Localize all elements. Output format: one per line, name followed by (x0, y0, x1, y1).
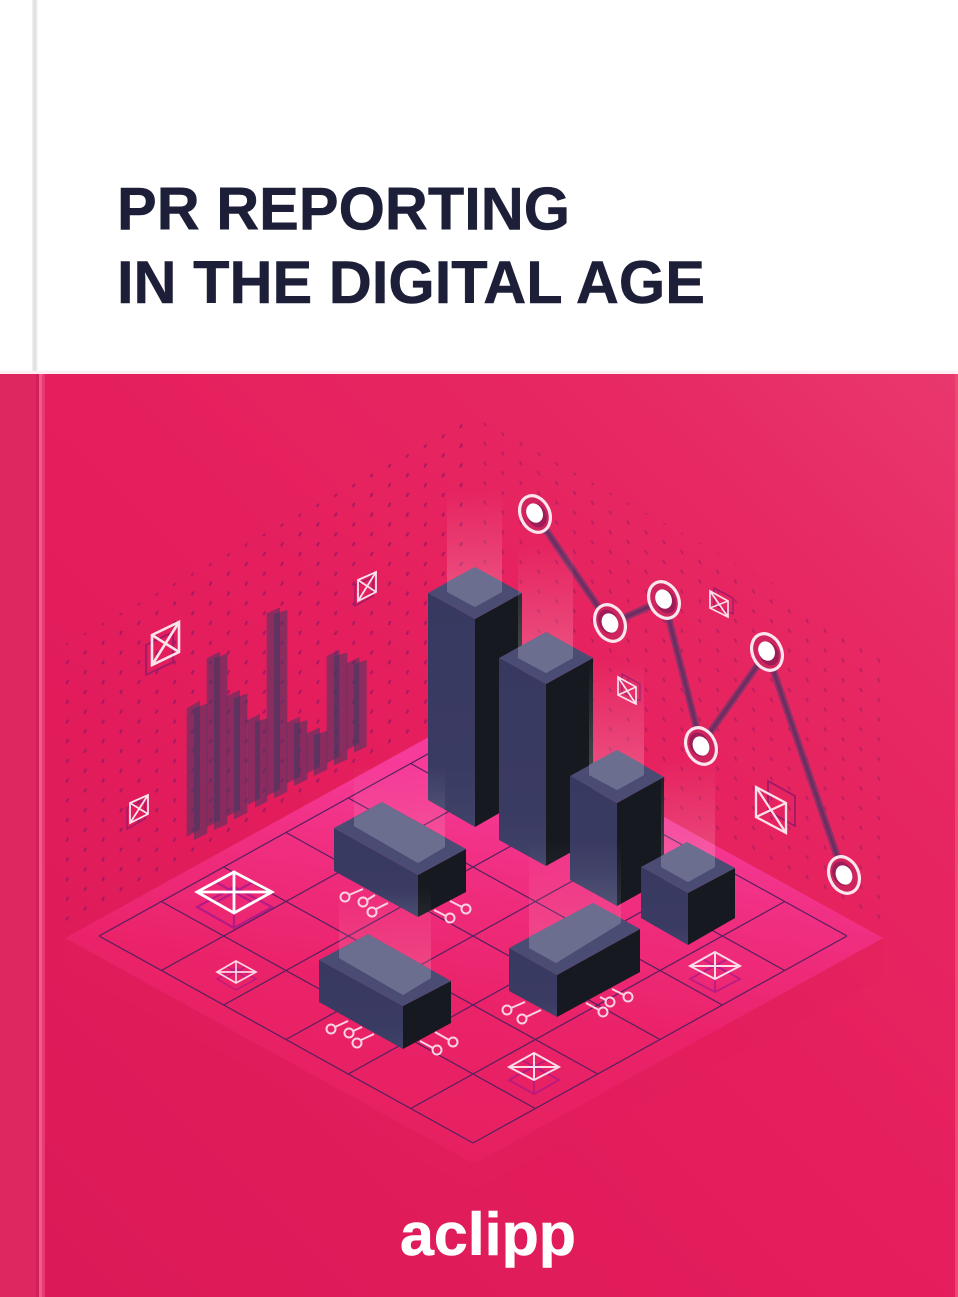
aclipp logo: aclipp (400, 1201, 576, 1268)
lit block tops (339, 567, 715, 995)
wall icon center right (618, 674, 640, 704)
title (117, 176, 705, 316)
floor surface (65, 712, 883, 1164)
white title panel (0, 0, 958, 373)
chart line (535, 514, 844, 876)
connector pins box C (502, 989, 632, 1024)
data point 5 (746, 629, 788, 675)
light beams (339, 490, 715, 995)
wall icon lower left (127, 795, 148, 829)
pink cover panel (0, 374, 958, 1297)
connector pins box B (326, 1021, 458, 1054)
cube (641, 842, 735, 945)
title: PR REPORTING (117, 176, 570, 242)
data point 4 (680, 723, 722, 769)
tall bar 2 (499, 632, 593, 866)
bar chart on left wall (187, 607, 367, 840)
floor icon right (690, 952, 740, 992)
wall icon upper right (710, 588, 733, 617)
flat box C (509, 903, 640, 1017)
connector pins box A (340, 889, 470, 922)
floor side faces (65, 938, 883, 1190)
floor icon large (197, 872, 272, 928)
data point 2 (589, 600, 631, 646)
data point 1 (514, 491, 556, 537)
bar 3 (570, 750, 664, 906)
floor icon small (217, 961, 256, 990)
data point 6 (823, 852, 865, 898)
dotted left wall (60, 417, 475, 938)
isometric floor (65, 712, 883, 1190)
flat box A (334, 802, 466, 917)
title: IN THE DIGITAL AGE (117, 249, 705, 316)
floor grid (99, 729, 847, 1143)
flat box B (319, 934, 451, 1049)
floor icon bottom (509, 1053, 559, 1094)
line chart (514, 491, 865, 898)
dotted right wall (474, 417, 888, 938)
wall icon upper left (355, 572, 376, 606)
data point 3 (643, 577, 685, 623)
tall bar 1 (428, 567, 522, 827)
wall icon large right (756, 781, 795, 833)
book spine (0, 371, 958, 1297)
spine shadow on white panel (32, 0, 38, 373)
wall icon large left (146, 622, 179, 675)
